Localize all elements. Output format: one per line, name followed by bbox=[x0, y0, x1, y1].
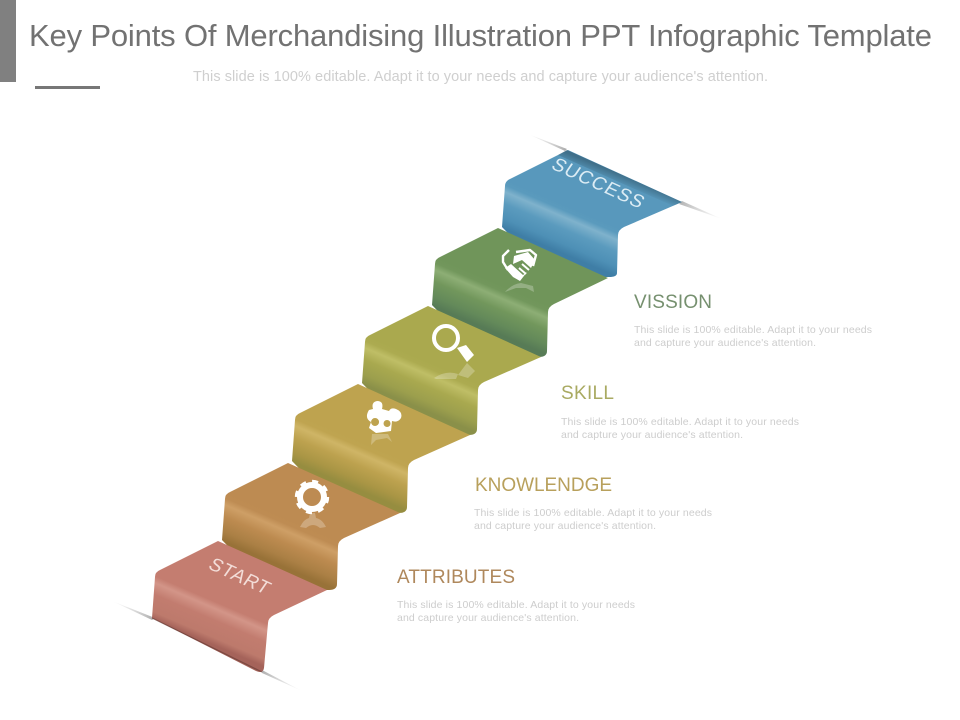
heading: skill: SKILL bbox=[561, 383, 614, 404]
icon: gear bbox=[296, 482, 328, 528]
icon: magnifier bbox=[434, 326, 475, 379]
icon: handshake bbox=[503, 250, 536, 292]
gear reflection bbox=[300, 513, 326, 528]
subtitle: This slide is 100% editable. Adapt it to your needs and capture your audience's attention. bbox=[193, 69, 768, 85]
handshake reflection bbox=[505, 283, 534, 292]
text block: vission: This slide is 100% editable. Adapt it to your needs bbox=[634, 324, 872, 336]
staircase bbox=[112, 134, 722, 691]
heading: knowledge: KNOWLENDGE bbox=[475, 475, 612, 496]
title underline accent bbox=[35, 86, 100, 89]
step: knowledge bbox=[292, 384, 470, 513]
start bottom edge bbox=[152, 618, 262, 672]
text block: attributes: and capture your audience's attention. bbox=[397, 612, 579, 624]
text block: knowledge: This slide is 100% editable. Adapt it to your needs bbox=[474, 507, 712, 519]
text block: vission: and capture your audience's attention. bbox=[634, 337, 816, 349]
step: success bbox=[502, 150, 682, 277]
panel: skill bbox=[561, 383, 799, 441]
label: success: SUCCESS bbox=[547, 155, 648, 213]
step: start bbox=[152, 541, 327, 672]
label: start: START bbox=[204, 555, 275, 599]
corner tab bbox=[0, 0, 16, 82]
panel: vission bbox=[634, 292, 872, 349]
title: Key Points Of Merchandising Illustration PPT Infographic Template bbox=[29, 18, 932, 53]
blue back edge shading bbox=[558, 150, 682, 206]
heading: vission: VISSION bbox=[634, 292, 712, 313]
text block: attributes: This slide is 100% editable. Adapt it to your needs bbox=[397, 599, 635, 611]
panel: knowledge bbox=[474, 475, 712, 532]
icon: puzzle piece bbox=[367, 401, 401, 445]
step: skill bbox=[362, 306, 541, 435]
text block: skill: This slide is 100% editable. Adapt it to your needs bbox=[561, 416, 799, 428]
floor shadow lines bbox=[112, 134, 722, 691]
heading: attributes: ATTRIBUTES bbox=[397, 567, 515, 588]
text block: knowledge: and capture your audience's attention. bbox=[474, 520, 656, 532]
magnifier reflection bbox=[434, 363, 475, 379]
text block: skill: and capture your audience's attention. bbox=[561, 429, 743, 441]
puzzle reflection bbox=[371, 434, 392, 445]
step: attributes bbox=[222, 463, 400, 590]
step: vission bbox=[432, 228, 608, 357]
panel: attributes bbox=[397, 567, 635, 624]
